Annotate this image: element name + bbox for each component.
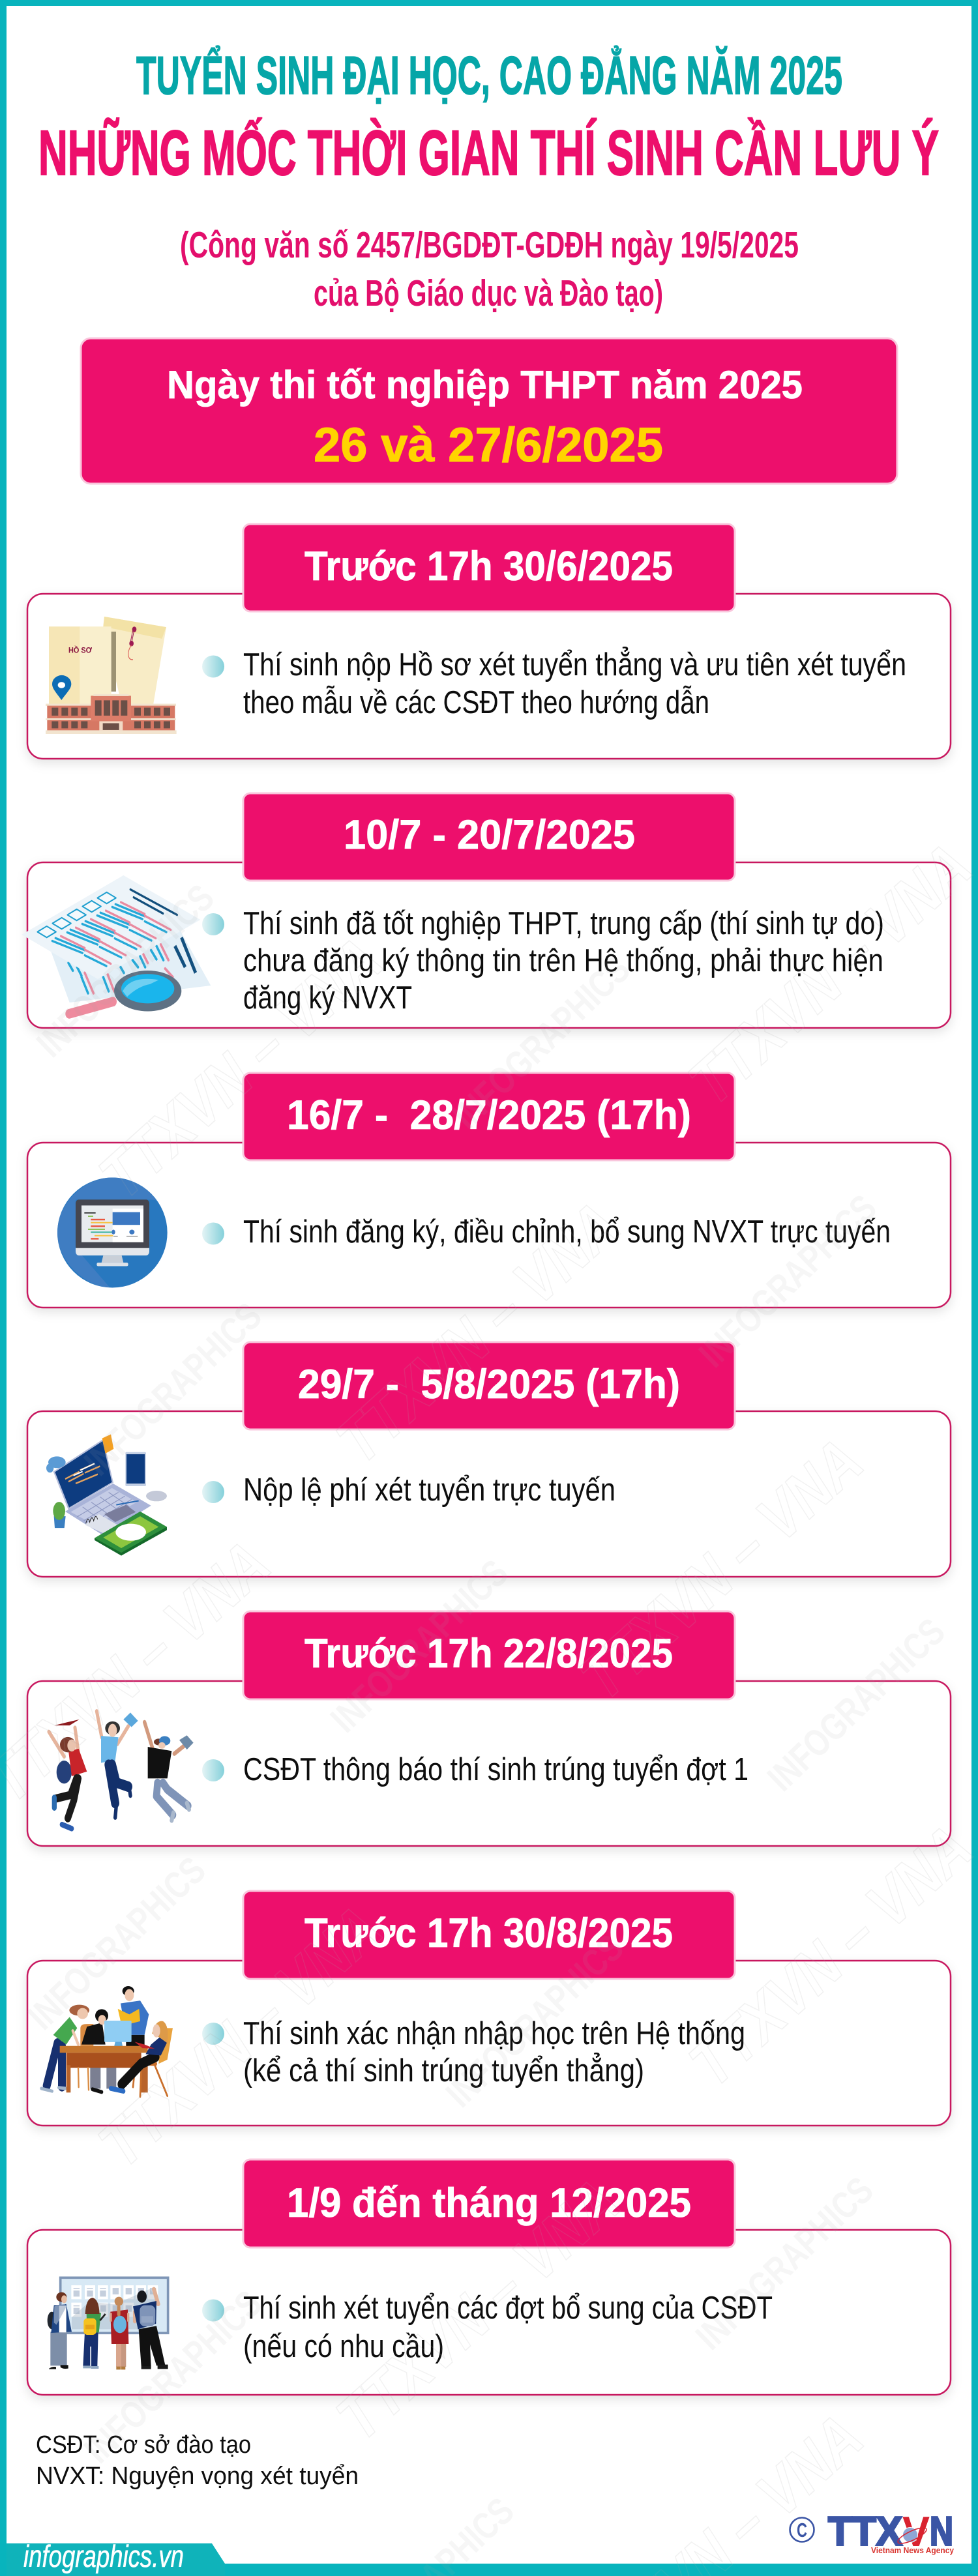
watermark: INFOGRAPHICS — [76, 2282, 270, 2471]
bullet — [202, 1481, 224, 1503]
description — [243, 2016, 745, 2088]
watermark: INFOGRAPHICS — [691, 1186, 885, 1375]
subtitle — [180, 224, 799, 314]
copyright mark: C — [797, 2519, 807, 2541]
agency wordmark: V — [902, 2508, 930, 2555]
date label: 16/7 - 28/7/2025 (17h) — [287, 1092, 691, 1138]
bullet — [202, 2023, 224, 2045]
panel: milestone 2 — [22, 793, 951, 1028]
description — [243, 647, 906, 720]
icon: students around a table — [41, 1986, 173, 2097]
panel: milestone 4 — [27, 1342, 951, 1577]
bullet — [202, 2300, 224, 2322]
title — [38, 45, 939, 188]
icon: laptop, phone and banknote — [46, 1434, 167, 1556]
abbreviations note: CSĐT: Cơ sở đào tạo — [36, 2431, 251, 2459]
bullet — [202, 1223, 224, 1245]
description: Thí sinh xét tuyển các đợt bổ sung của CSĐT — [243, 2291, 773, 2326]
icon: dossier folder and school building: HỒ SƠ — [68, 645, 92, 655]
watermark: INFOGRAPHICS — [76, 1295, 270, 1484]
watermark: INFOGRAPHICS — [438, 1926, 632, 2115]
description: CSĐT thông báo thí sinh trúng tuyển đợt 1 — [243, 1752, 748, 1787]
description: (nếu có nhu cầu) — [243, 2329, 444, 2364]
abbreviations note: NVXT: Nguyện vọng xét tuyển — [36, 2463, 359, 2490]
panel: milestone 3 — [27, 1073, 951, 1308]
date label: Trước 17h 30/6/2025 — [304, 544, 673, 589]
panel: milestone 7 — [27, 2159, 951, 2395]
bullet — [202, 656, 224, 678]
banner heading: Ngày thi tốt nghiệp THPT năm 2025 — [167, 363, 803, 407]
date tag — [243, 524, 735, 611]
watermark: INFOGRAPHICS — [323, 1551, 516, 1740]
exam date banner — [81, 338, 897, 484]
watermark: INFOGRAPHICS — [688, 2169, 882, 2358]
watermark: INFOGRAPHICS — [20, 1849, 214, 2038]
description — [243, 906, 884, 1016]
panel: milestone 5 — [27, 1611, 951, 1846]
logo: TTXVN — [790, 2508, 955, 2555]
watermark: INFOGRAPHICS — [445, 948, 638, 1137]
bullet — [202, 1759, 224, 1781]
icon: forms and magnifier — [22, 875, 211, 1014]
description: theo mẫu về các CSĐT theo hướng dẫn — [243, 685, 709, 720]
date tag — [243, 1342, 735, 1429]
watermark — [0, 830, 978, 2576]
date tag — [243, 1891, 735, 1979]
description: chưa đăng ký thông tin trên Hệ thống, phải thực hiện — [243, 943, 883, 978]
date tag — [243, 1073, 735, 1160]
watermark: TTXVN – VNA — [85, 924, 395, 1212]
panel: milestone 1 — [27, 524, 951, 759]
date label: Trước 17h 30/8/2025 — [304, 1910, 673, 1956]
abbreviations note — [36, 2431, 359, 2490]
description: Nộp lệ phí xét tuyển trực tuyến — [243, 1472, 615, 1508]
watermark: TTXVN – VNA — [566, 1425, 876, 1714]
watermark: TTXVN – VNA — [323, 2165, 632, 2454]
panel: milestone 6 — [27, 1891, 951, 2126]
copyright mark — [790, 2517, 814, 2542]
agency wordmark: TTX — [828, 2510, 902, 2554]
date tag — [243, 793, 735, 881]
icon: jumping students — [49, 1711, 194, 1828]
description: đăng ký NVXT — [243, 980, 412, 1016]
banner dates: 26 và 27/6/2025 — [314, 418, 663, 472]
date label: 29/7 - 5/8/2025 (17h) — [298, 1362, 680, 1407]
description — [243, 2291, 773, 2364]
bullet — [202, 913, 224, 935]
agency tagline: Vietnam News Agency — [871, 2545, 955, 2555]
icon: computer on blue circle — [57, 1178, 168, 1288]
date tag — [243, 1611, 735, 1699]
icon: dossier folder and school building — [46, 617, 177, 734]
icon: students at notice board — [48, 2277, 168, 2369]
watermark: TTXVN – VNA — [323, 1188, 632, 1477]
date tag — [243, 2159, 735, 2247]
description: Thí sinh xác nhận nhập học trên Hệ thống — [243, 2016, 745, 2051]
date label: Trước 17h 22/8/2025 — [304, 1631, 673, 1676]
subtitle line 2: của Bộ Giáo dục và Đào tạo) — [314, 272, 663, 314]
date label: 10/7 - 20/7/2025 — [344, 812, 635, 858]
watermark: INFOGRAPHICS — [29, 876, 222, 1065]
footer tab — [7, 2539, 225, 2576]
agency wordmark — [828, 2508, 953, 2555]
site name: infographics.vn — [23, 2539, 184, 2573]
date label: 1/9 đến tháng 12/2025 — [287, 2180, 691, 2226]
agency wordmark: N — [930, 2510, 953, 2554]
watermark: TTXVN – VNA — [85, 1892, 394, 2181]
description: (kể cả thí sinh trúng tuyển thẳng) — [243, 2053, 644, 2088]
